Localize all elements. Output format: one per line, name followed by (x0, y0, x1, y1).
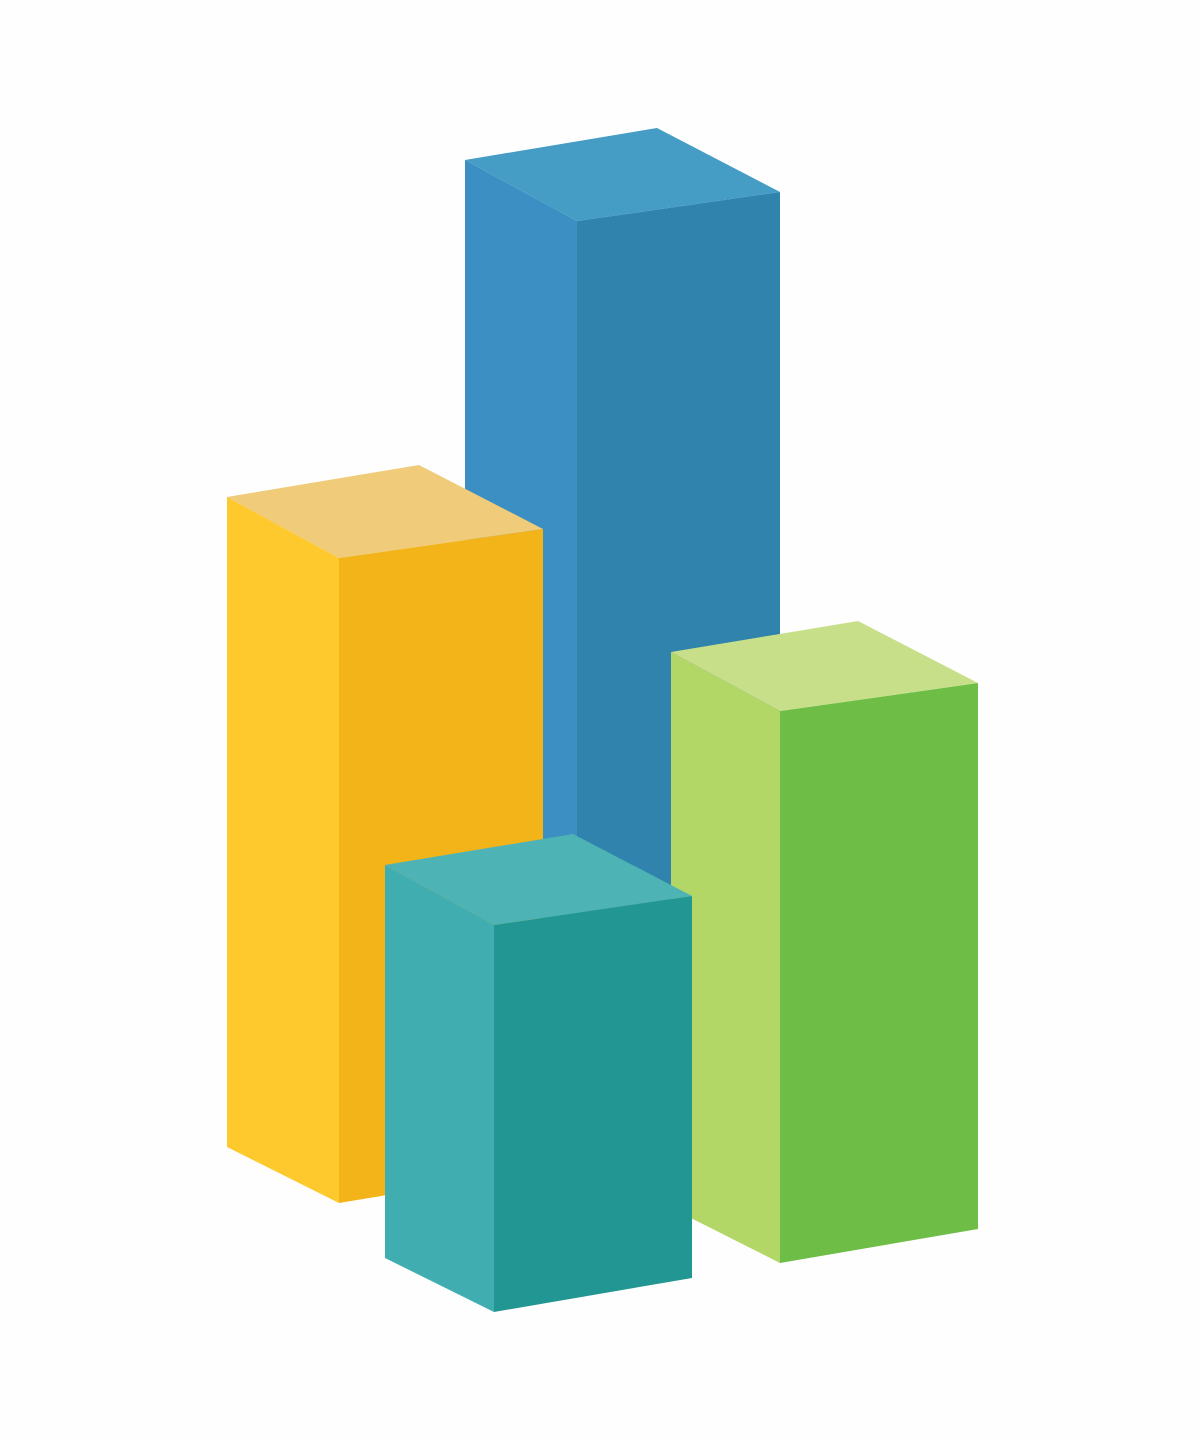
green bar (671, 621, 978, 1263)
teal bar (385, 834, 692, 1312)
blue bar (465, 128, 780, 1000)
yellow bar (227, 465, 543, 1203)
